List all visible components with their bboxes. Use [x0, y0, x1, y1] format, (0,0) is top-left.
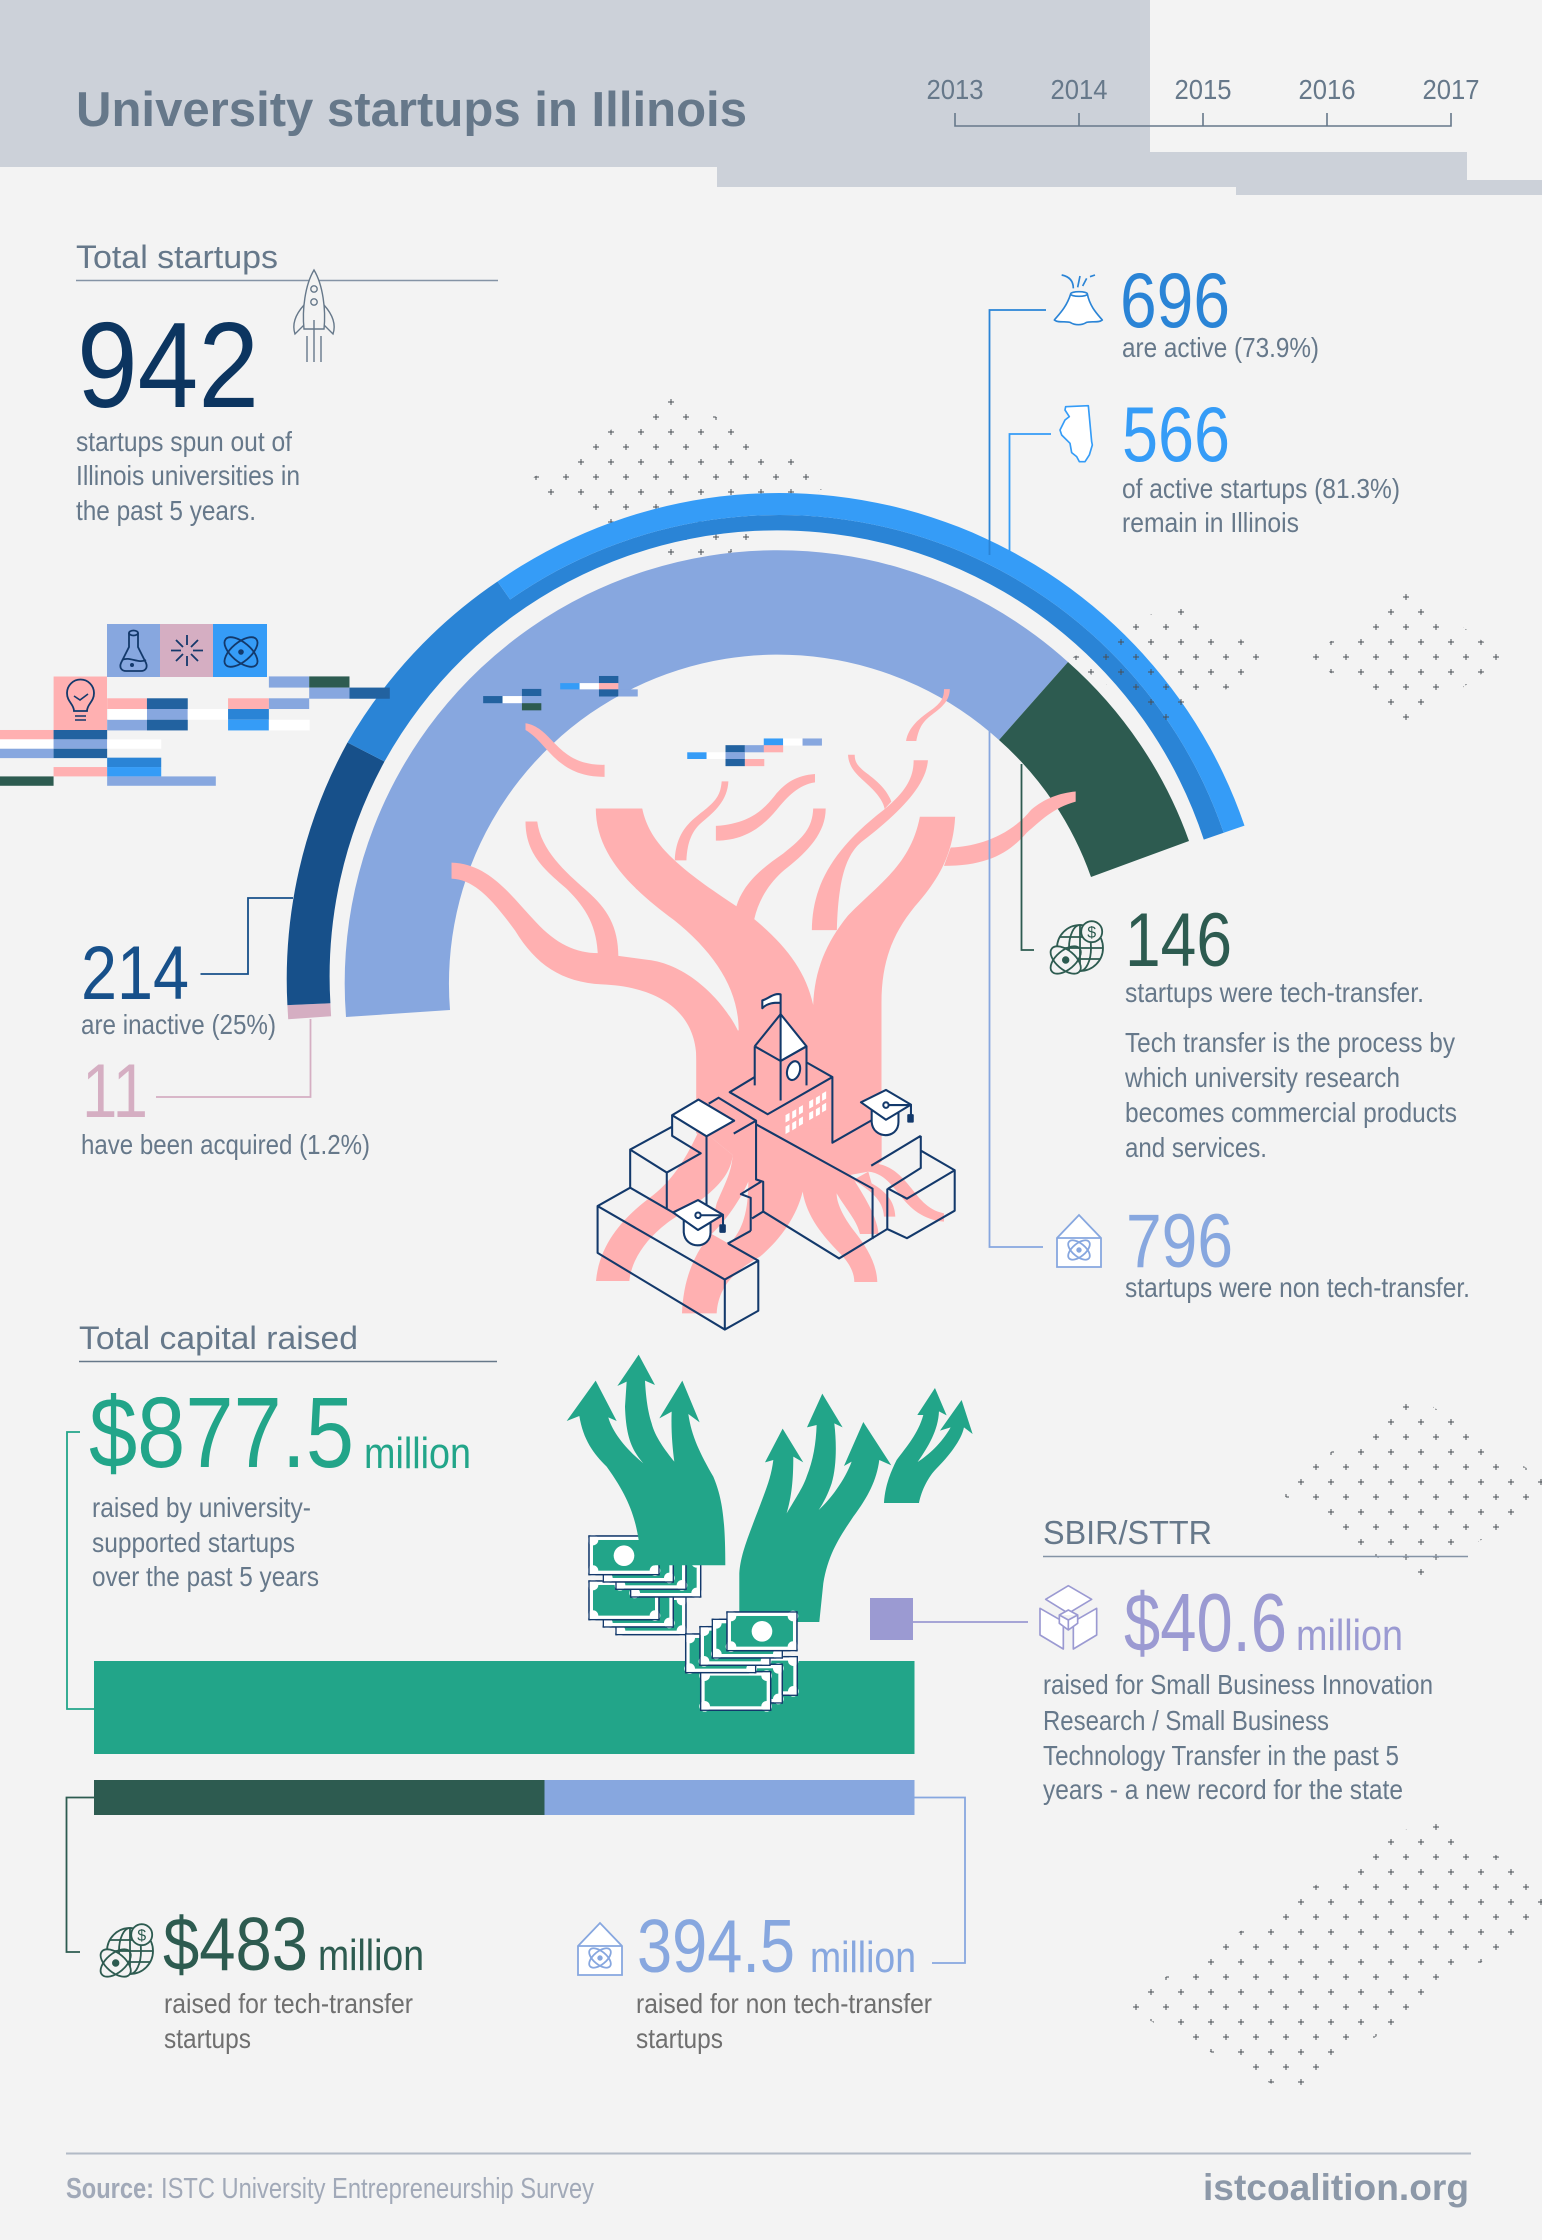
icon: graduation cap right — [861, 1090, 913, 1135]
number: 877.5 million: $877.5 — [89, 1377, 354, 1489]
leader lines for arc stats — [156, 310, 1051, 1247]
stat: 696 active: are active (73.9%) — [1122, 332, 1319, 363]
website: istcoalition.org — [1203, 2167, 1469, 2208]
description: capital raised: over the past 5 years — [92, 1561, 319, 1592]
tree left branches — [452, 723, 738, 1127]
description: SBIR/STTR: Research / Small Business — [1043, 1705, 1329, 1736]
icon: house with atom — [578, 1923, 622, 1975]
number: 942: 942 — [77, 297, 259, 433]
icon: rocket — [294, 270, 334, 362]
stat: 566 remain in Illinois: remain in Illinois — [1122, 507, 1299, 538]
stat: 214 inactive: are inactive (25%) — [81, 1009, 276, 1040]
description: SBIR/STTR — [1043, 1669, 1433, 1805]
icon: volcano — [1054, 275, 1102, 325]
source — [66, 2173, 594, 2205]
panel: SBIR/STTR — [870, 1514, 1468, 1805]
money stack: upper left — [588, 1535, 702, 1636]
text: tech transfer definition: Tech transfer is the process by — [1125, 1027, 1455, 1058]
arc segment: remain in Illinois — [498, 493, 1244, 833]
tree roots — [596, 1128, 944, 1313]
icon: globe with atom and coin — [96, 1924, 153, 1982]
header band — [0, 0, 1542, 195]
text: tech transfer definition: which university research — [1124, 1062, 1400, 1093]
timeline 2013 to 2017: 2016 — [1298, 74, 1356, 105]
arc segment: tech-transfer — [999, 662, 1189, 877]
stat: 214 inactive: 214 — [81, 931, 189, 1016]
stat: 796 non tech-transfer: 796 — [1126, 1199, 1233, 1284]
number: 394.5 million: million — [810, 1933, 916, 1982]
arrows: left cluster — [567, 1355, 725, 1565]
number: 483 million: $483 — [163, 1902, 308, 1986]
icon: spark — [160, 624, 213, 677]
stat: 11 acquired: 11 — [82, 1049, 148, 1134]
dotted pattern over arc — [1068, 603, 1280, 722]
illustration: tree growing from university — [452, 689, 1076, 1330]
stat: 566 remain in Illinois — [1060, 390, 1400, 538]
timeline 2013 to 2017: 2014 — [1050, 74, 1108, 105]
marker square — [870, 1598, 913, 1640]
arc segment: active — [348, 515, 1224, 840]
stat: 566 remain in Illinois: of active startups (81.3%) — [1122, 473, 1400, 504]
university building — [598, 994, 955, 1330]
number: 877.5 million: million — [364, 1429, 471, 1478]
icon: light bulb — [54, 676, 107, 730]
number: 394.5 million — [637, 1904, 916, 1988]
icon: open box — [1040, 1586, 1097, 1649]
icon: flask — [107, 624, 160, 677]
number: 483 million: million — [318, 1931, 424, 1980]
arrows: right cluster — [884, 1388, 973, 1503]
block: floating pixels — [483, 676, 822, 766]
arc segment: acquired — [287, 1003, 331, 1019]
timeline 2013 to 2017 — [926, 74, 1480, 126]
icon: globe with atom and coin — [1046, 921, 1103, 979]
source: Source: — [66, 2173, 154, 2205]
description: total startups: the past 5 years. — [76, 495, 256, 526]
panel: SBIR/STTR: SBIR/STTR — [1043, 1514, 1212, 1551]
text: tech transfer definition: and services. — [1125, 1132, 1267, 1163]
arc segment: inactive — [287, 742, 384, 1005]
description: SBIR/STTR: Technology Transfer in the past 5 — [1043, 1740, 1399, 1771]
bar: tech-transfer vs non tech-transfer — [94, 1780, 914, 1815]
tree trunk and right branches — [596, 689, 1076, 1134]
bar: total capital — [94, 1661, 914, 1754]
description: capital raised: supported startups — [92, 1527, 295, 1558]
stat: 696 active — [1054, 256, 1319, 363]
panel: non tech-transfer capital: startups — [636, 2023, 723, 2054]
pixel data blocks — [0, 676, 822, 786]
description: capital raised: raised by university- — [92, 1492, 311, 1523]
illustration: arrows and money — [567, 1355, 973, 1712]
panel: tech-transfer capital: startups — [164, 2023, 251, 2054]
description: total startups: Illinois universities in — [76, 460, 300, 491]
arc segment: non tech-transfer — [345, 550, 1068, 1017]
stat: 796 non tech-transfer — [1057, 1199, 1470, 1303]
description: SBIR/STTR: years - a new record for the state — [1043, 1774, 1403, 1805]
panel: non tech-transfer capital: raised for non tech-transfer — [636, 1988, 932, 2019]
stat: 214 inactive — [81, 931, 276, 1040]
windows — [786, 1091, 826, 1134]
number: 483 million — [163, 1902, 424, 1986]
number: 394.5 million: 394.5 — [637, 1904, 795, 1988]
icon: globe with atom and coin: $ — [137, 1928, 146, 1944]
arrows: centre cluster — [739, 1394, 891, 1622]
source: ISTC University Entrepreneurship Survey — [161, 2173, 594, 2205]
description: capital raised — [92, 1492, 319, 1592]
description: total startups: startups spun out of — [76, 426, 292, 457]
stat: 146 tech-transfer: 146 — [1125, 898, 1232, 983]
arc chart: tech-transfer inner ring — [345, 550, 1189, 1017]
text: tech transfer definition — [1124, 1027, 1457, 1163]
icon: globe with atom and coin: $ — [1087, 924, 1096, 942]
icon: house with atom — [1057, 1215, 1101, 1267]
stat: 146 tech-transfer: startups were tech-transfer. — [1125, 977, 1424, 1008]
stat: 696 active: 696 — [1120, 256, 1230, 344]
icon tiles: research fields — [54, 624, 267, 730]
stat: 11 acquired: have been acquired (1.2%) — [81, 1129, 370, 1160]
icon: atom — [213, 624, 267, 677]
text: tech transfer definition: becomes commercial products — [1125, 1097, 1457, 1128]
panel: total capital raised — [67, 1320, 497, 1709]
panel: total startups — [76, 239, 498, 526]
icon: Illinois outline — [1060, 406, 1092, 462]
description: total startups — [76, 426, 300, 526]
money stack: lower right — [684, 1611, 799, 1712]
block: icon row trail — [0, 676, 390, 786]
number: 40.6 million: million — [1296, 1611, 1403, 1660]
icon: graduation cap left — [673, 1200, 725, 1245]
clock tower — [755, 994, 807, 1100]
number: 40.6 million: $40.6 — [1124, 1576, 1287, 1669]
panel: tech-transfer capital: raised for tech-transfer — [164, 1988, 413, 2019]
timeline 2013 to 2017: 2017 — [1422, 74, 1480, 105]
timeline 2013 to 2017: 2013 — [926, 74, 984, 105]
stat: 796 non tech-transfer: startups were non tech-transfer. — [1125, 1272, 1470, 1303]
arc chart: startup status outer ring — [287, 493, 1244, 1019]
timeline 2013 to 2017: 2015 — [1174, 74, 1232, 105]
panel: non tech-transfer capital — [578, 1798, 965, 2054]
description: SBIR/STTR: raised for Small Business Innovation — [1043, 1669, 1433, 1700]
stat: 566 remain in Illinois: 566 — [1122, 390, 1230, 478]
footer — [66, 2154, 1471, 2208]
heading: total startups: Total startups — [76, 239, 278, 275]
dotted pattern: decorative diamonds — [526, 392, 1542, 2095]
panel: total capital raised: Total capital raised — [79, 1320, 358, 1356]
stat: 11 acquired — [81, 1049, 370, 1160]
panel: tech-transfer capital — [66, 1798, 424, 2054]
title: University startups in Illinois — [76, 83, 747, 137]
stat: 146 tech-transfer — [1046, 898, 1457, 1163]
